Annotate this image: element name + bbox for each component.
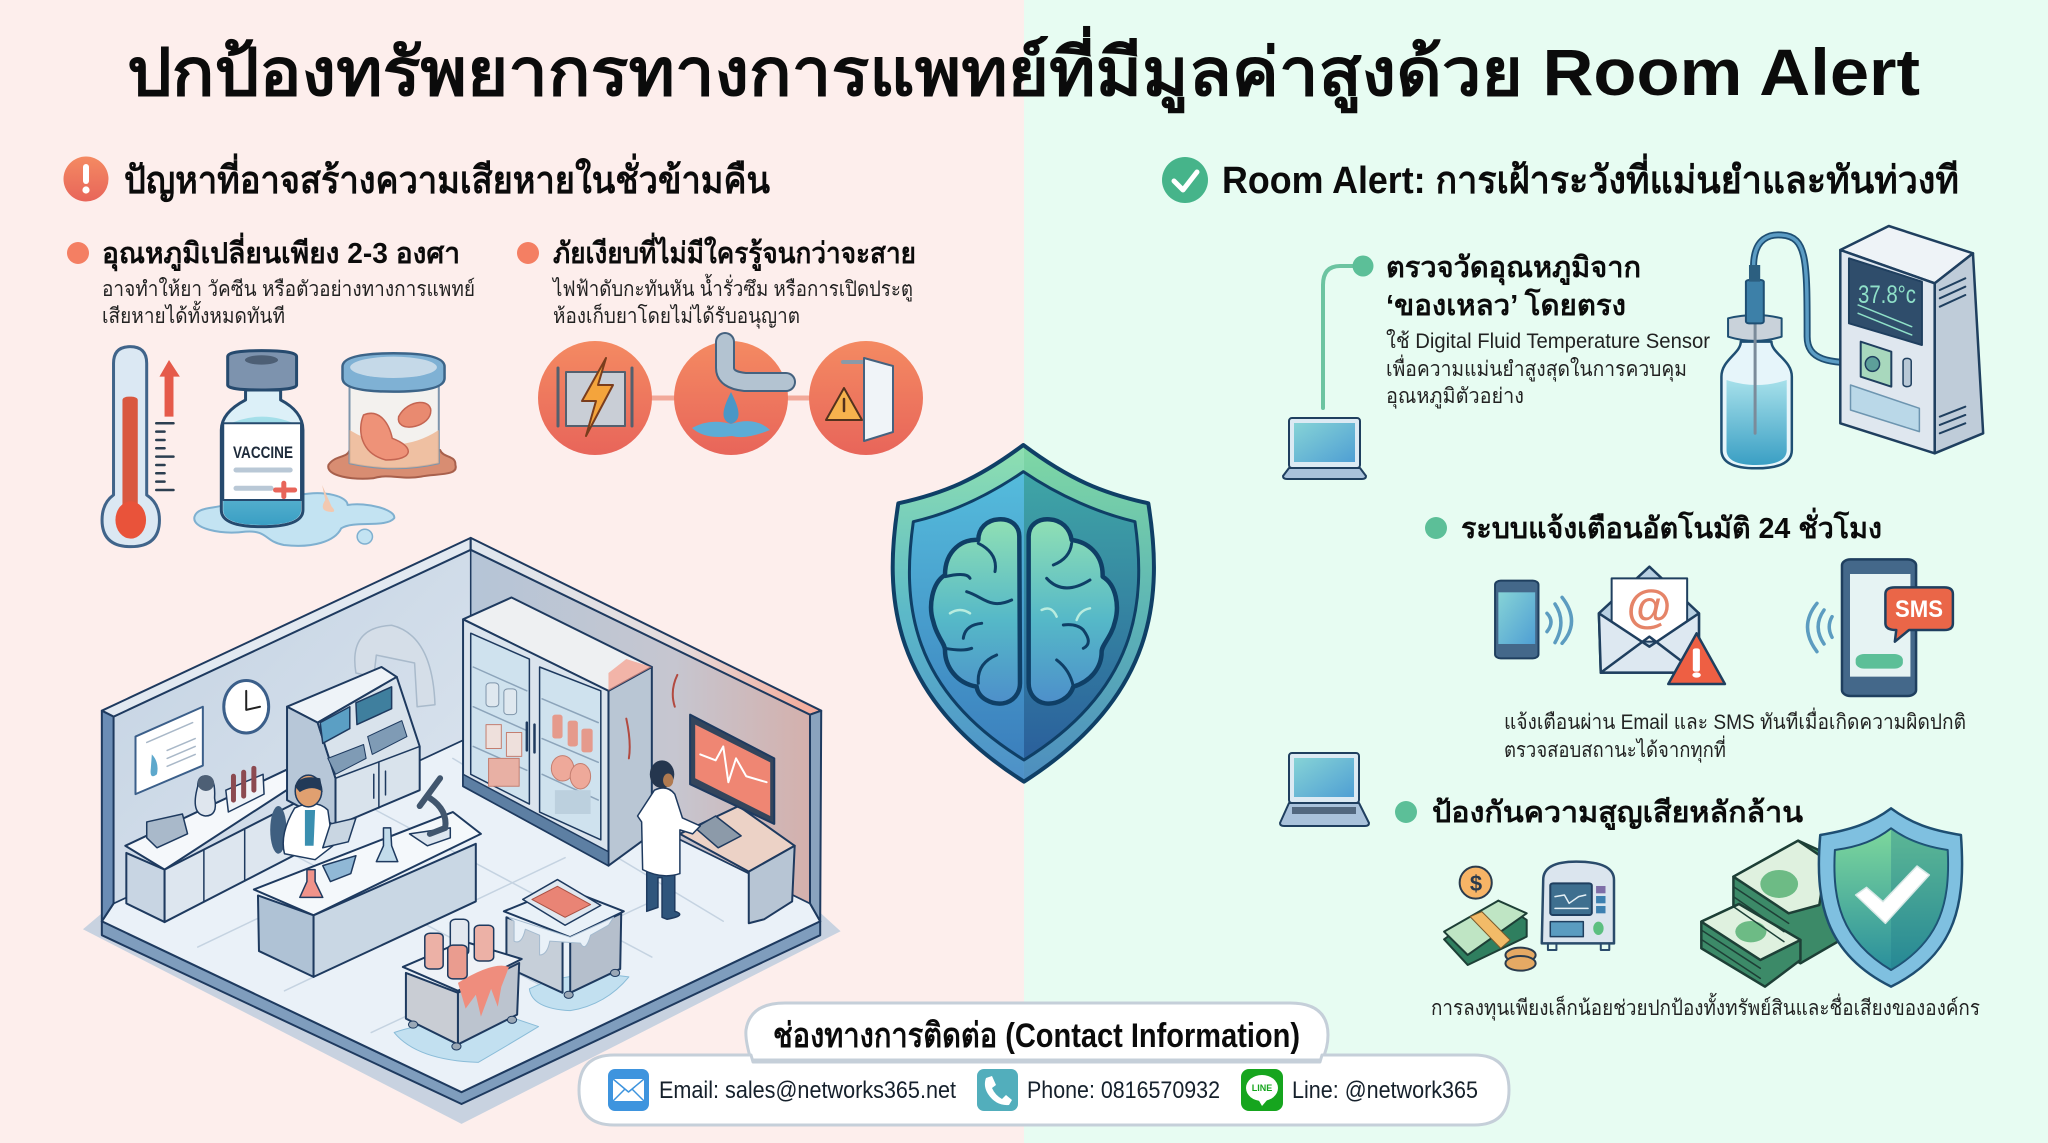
- panel: problems: [64, 153, 923, 547]
- text block: sensor: ใช้ Digital Fluid Temperature Sensor: [1386, 329, 1710, 353]
- seated scientist: [270, 775, 356, 860]
- coin symbol: $: [1470, 871, 1482, 896]
- monitor desk: [680, 715, 795, 923]
- vial trolley: [394, 919, 539, 1062]
- SMS label: SMS: [1895, 596, 1943, 623]
- analyzer machine: [287, 667, 420, 826]
- title: ปกป้องทรัพยากรทางการแพทย์ที่มีมูลค่าสูงด้วย Room Alert: [127, 25, 1920, 114]
- contact line: Line: @network365: [1292, 1077, 1478, 1104]
- center island: [254, 778, 481, 977]
- panel: right background: [1024, 0, 2048, 1143]
- bullet: prevent loss: ป้องกันความสูญเสียหลักล้าน: [1432, 797, 1803, 830]
- bullet dot: sensor: [1352, 256, 1374, 276]
- heading: room alert: Room Alert: การเฝ้าระวังที่แม่นยำและทันท่วงที: [1222, 153, 1959, 202]
- email at sign: @: [1627, 580, 1671, 632]
- text block: sensor: ‘ของเหลว’ โดยตรง: [1386, 287, 1626, 322]
- wall clock: [224, 681, 269, 733]
- icon: brain shield: [893, 445, 1154, 782]
- panel: left background: [0, 0, 1024, 1143]
- icon: thermometer: [102, 347, 180, 547]
- icon: SMS phone: [1808, 559, 1953, 696]
- meat trolley: [504, 880, 629, 1011]
- icon: specimen jar: [328, 353, 456, 479]
- wall vent duct: [355, 625, 435, 707]
- contact bar: [579, 1055, 1509, 1125]
- icon: email: [608, 1069, 649, 1111]
- text block: alerts: [1504, 707, 1966, 763]
- contact phone: Phone: 0816570932: [1027, 1077, 1220, 1104]
- icon: warning badge: [64, 156, 108, 202]
- text: investment caption: การลงทุนเพียงเล็กน้อยช่วยปกป้องทั้งทรัพย์สินและชื่อเสียงขององค์กร: [1431, 993, 1980, 1021]
- connector line: laptop to sensor: [1323, 266, 1363, 408]
- bullet: temperature: เสียหายได้ทั้งหมดทันที: [102, 301, 285, 328]
- icon: email alert: [1599, 567, 1725, 684]
- bullet: silent threats: ภัยเงียบที่ไม่มีใครรู้จนกว่าจะสาย: [553, 232, 916, 271]
- icon: line: LINE: [1252, 1083, 1272, 1093]
- wall poster: [136, 707, 203, 794]
- icon: check badge: [1162, 157, 1208, 203]
- text block: sensor: ตรวจวัดอุณหภูมิจาก: [1386, 252, 1641, 285]
- icon: power outage: [538, 341, 652, 455]
- panel: contact: [579, 1003, 1509, 1125]
- panel: room alert solutions: [1162, 153, 1983, 1021]
- fridge: [463, 597, 677, 866]
- icon: fluid sensor and monitor: [1721, 226, 1983, 468]
- contact title tab: [746, 1003, 1328, 1060]
- bullet: temperature: [67, 232, 475, 328]
- back counter: [125, 768, 305, 922]
- icon: laptop bottom: [1280, 753, 1369, 826]
- text block: alerts: แจ้งเตือนผ่าน Email และ SMS ทันทีเมื่อเกิดความผิดปกติ: [1504, 707, 1966, 734]
- text block: alerts: ตรวจสอบสถานะได้จากทุกที่: [1504, 735, 1726, 763]
- bullet: temperature: อุณหภูมิเปลี่ยนเพียง 2-3 องศา: [102, 232, 460, 271]
- bullet: silent threats: ห้องเก็บยาโดยไม่ได้รับอนุญาต: [553, 302, 800, 329]
- text block: sensor: เพื่อความแม่นยำสูงสุดในการควบคุม: [1386, 354, 1687, 382]
- icon: phone: [977, 1069, 1018, 1111]
- bullet: temperature: อาจทำให้ยา วัคซีน หรือตัวอย่างทางการแพทย์: [102, 277, 475, 301]
- monitor reading: 37.8°c: [1858, 281, 1916, 309]
- icon: small phone: [1495, 581, 1572, 658]
- bullet: silent threats: ไฟฟ้าดับกะทันหัน น้ำรั่วซึม หรือการเปิดประตู: [551, 274, 913, 302]
- standing scientist: [638, 760, 700, 919]
- heading: problems: ปัญหาที่อาจสร้างความเสียหายในชั่วข้ามคืน: [124, 153, 770, 202]
- icon: laptop top: [1283, 418, 1366, 479]
- bullet: automatic alerts: ระบบแจ้งเตือนอัตโนมัติ 24 ชั่วโมง: [1461, 507, 1882, 545]
- text block: sensor: อุณหภูมิตัวอย่าง: [1386, 385, 1524, 409]
- text block: sensor: [1386, 252, 1710, 409]
- icon: risks row: [538, 341, 923, 455]
- illustration: isometric lab room: [83, 538, 841, 1124]
- icon: small investment: [1444, 862, 1614, 971]
- icon: cash pile and shield: [1701, 808, 1962, 987]
- icon: line: [1241, 1069, 1283, 1111]
- contact heading: ช่องทางการติดต่อ (Contact Information): [773, 1017, 1300, 1055]
- icon: open door: [809, 341, 923, 455]
- bullet: silent threats: [517, 232, 916, 329]
- icon: water leak: [674, 341, 788, 455]
- icon: vaccine vial: [194, 351, 394, 546]
- contact email: Email: sales@networks365.net: [659, 1077, 956, 1104]
- vial label text: VACCINE: [233, 443, 293, 462]
